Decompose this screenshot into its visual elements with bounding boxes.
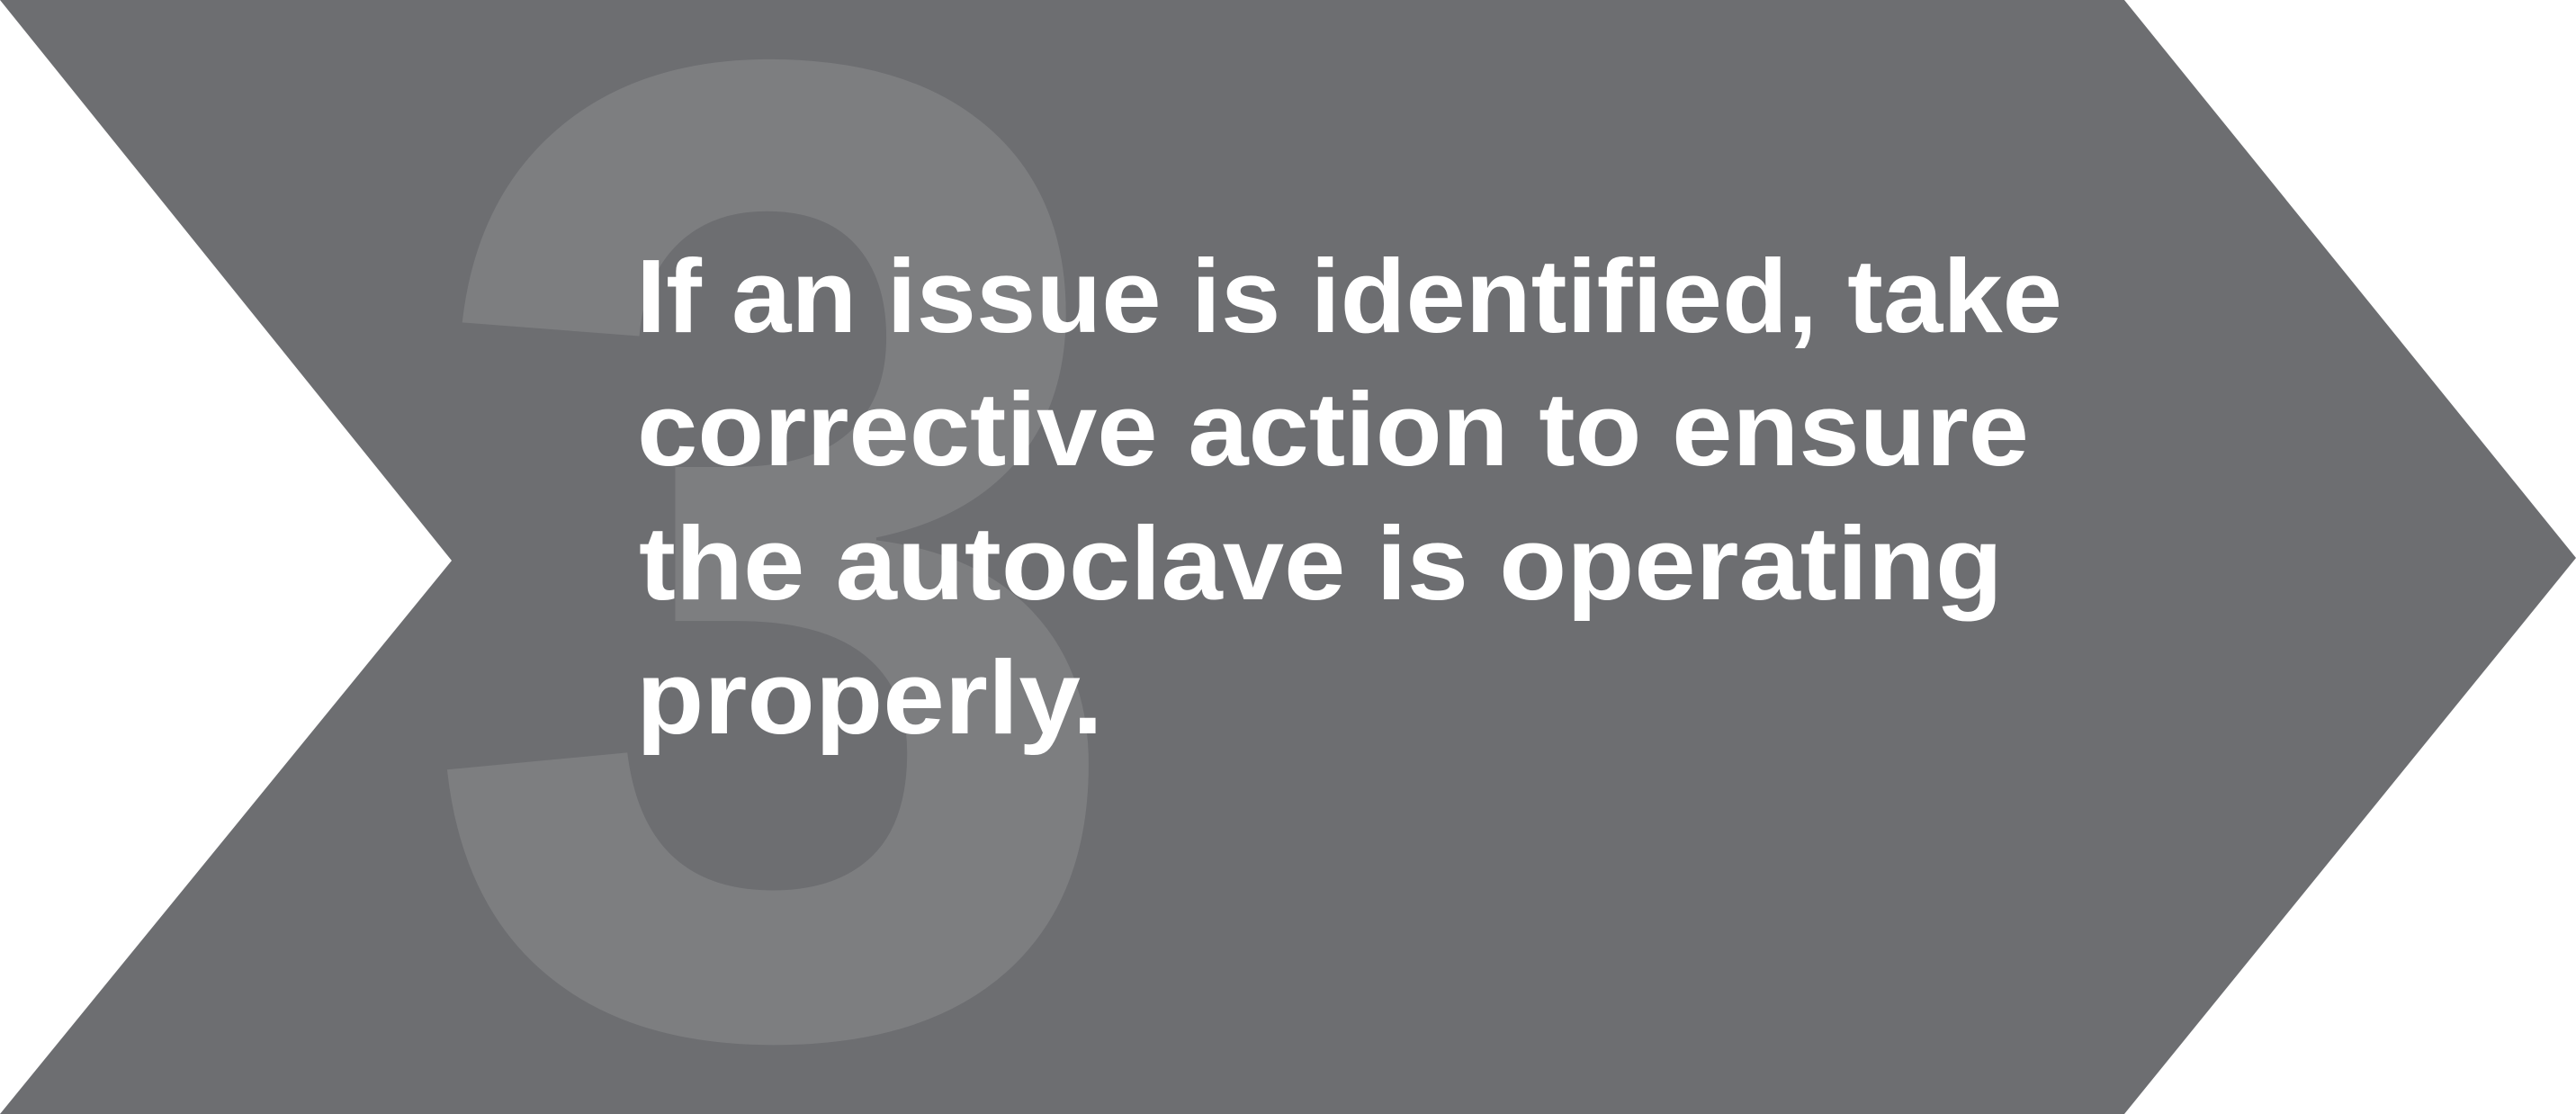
body text: the autoclave is operating	[639, 505, 2003, 622]
body text: properly.	[636, 639, 1103, 756]
body text: corrective action to ensure	[637, 371, 2029, 488]
body text: If an issue is identified, take	[636, 238, 2062, 355]
